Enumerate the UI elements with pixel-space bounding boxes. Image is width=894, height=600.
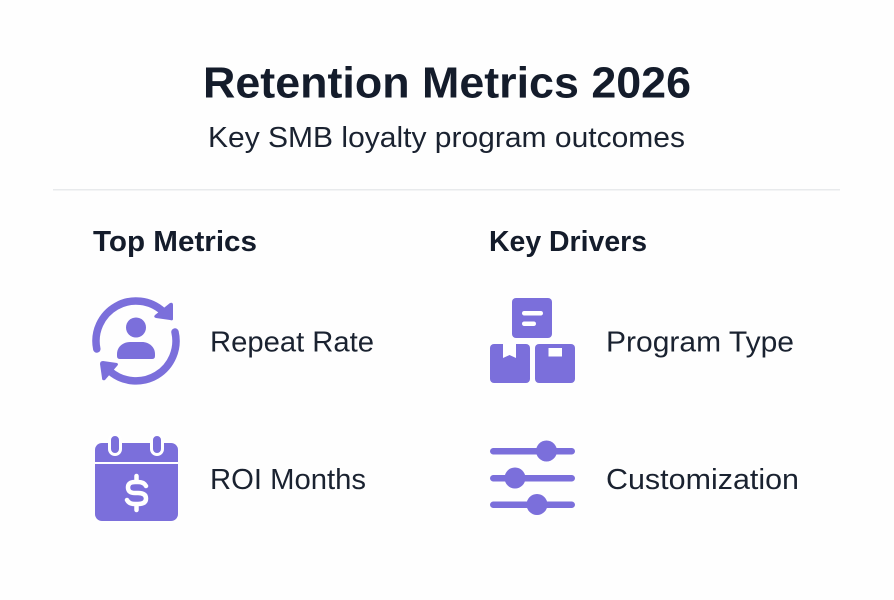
icon: boxes <box>490 298 575 383</box>
icon: sliders <box>490 440 575 515</box>
icon: repeat customer <box>96 301 176 381</box>
label: roi months: ROI Months <box>210 464 366 496</box>
label: repeat rate: Repeat Rate <box>210 326 374 358</box>
heading: top metrics: Top Metrics <box>93 226 257 258</box>
title: Retention Metrics 2026 <box>203 60 691 108</box>
subtitle: Key SMB loyalty program outcomes <box>208 122 685 154</box>
heading: key drivers: Key Drivers <box>489 226 647 258</box>
label: program type: Program Type <box>606 326 794 358</box>
label: customization: Customization <box>606 464 799 496</box>
icon: calendar with dollar <box>95 434 178 521</box>
